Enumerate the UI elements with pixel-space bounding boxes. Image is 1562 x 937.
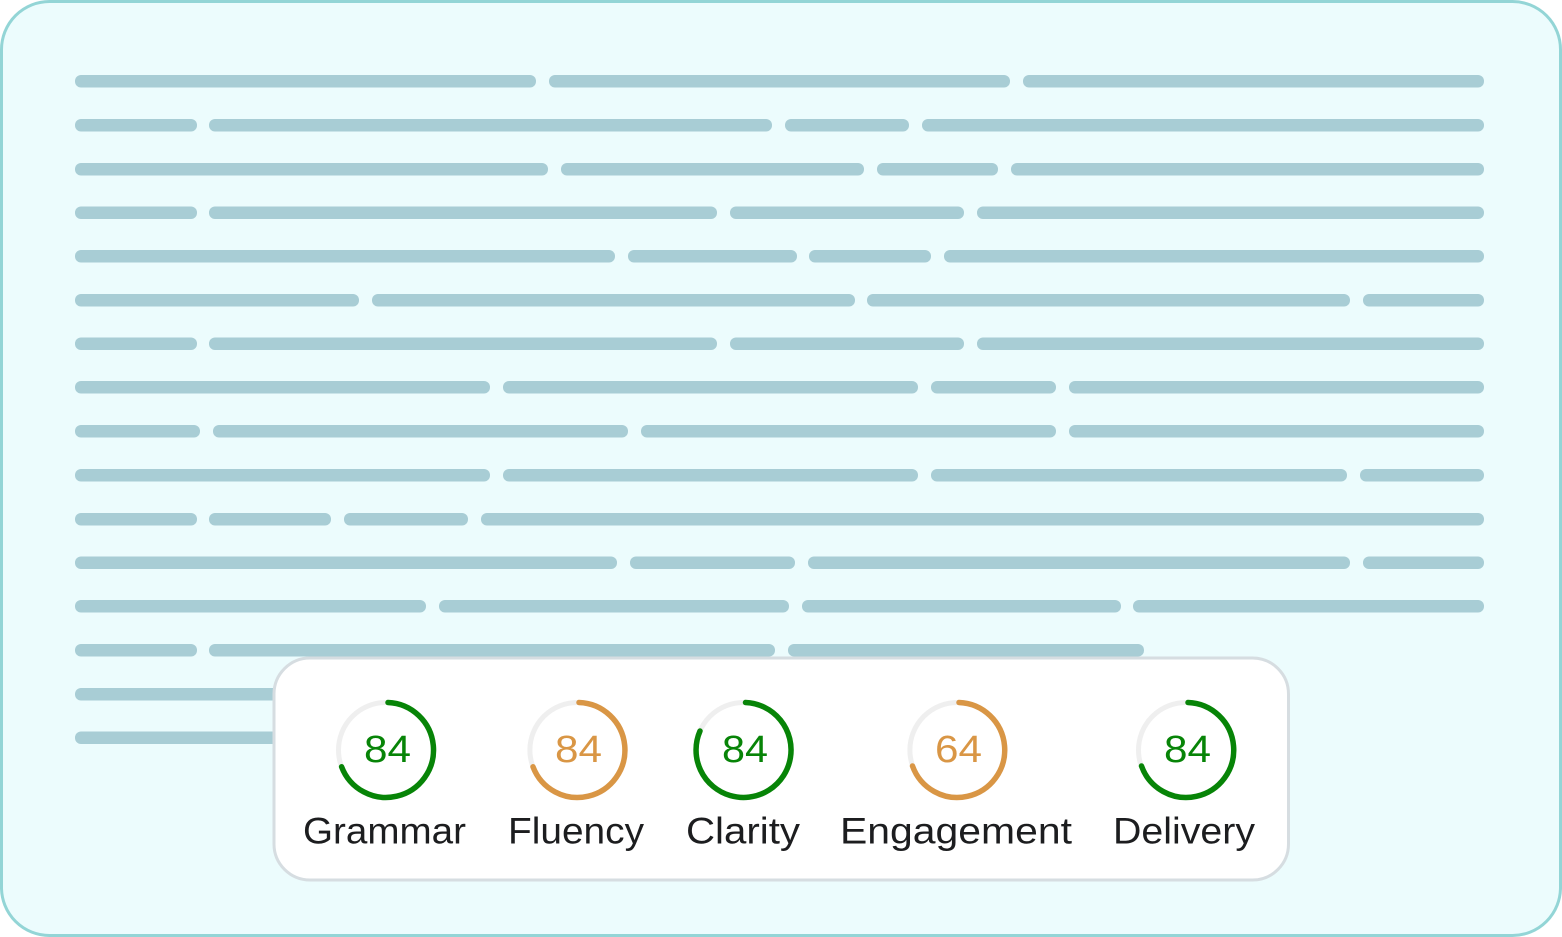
score: Fluency bbox=[508, 702, 645, 852]
score: Fluency: Fluency bbox=[508, 810, 645, 852]
score: Clarity: Clarity bbox=[686, 810, 801, 852]
placeholder text lines bbox=[75, 75, 1484, 744]
score: Clarity bbox=[686, 702, 801, 852]
score: Fluency: 84 bbox=[555, 729, 602, 771]
score: Grammar: 84 bbox=[364, 729, 411, 771]
panel: scores card bbox=[274, 658, 1288, 880]
score: Clarity: 84 bbox=[722, 729, 768, 771]
score: Engagement: 64 bbox=[935, 729, 982, 771]
score: Delivery: Delivery bbox=[1113, 810, 1256, 852]
score: Engagement bbox=[840, 702, 1073, 852]
score: Delivery bbox=[1113, 702, 1256, 852]
score: Grammar: Grammar bbox=[303, 810, 466, 852]
score: Engagement: Engagement bbox=[840, 810, 1073, 852]
score: Grammar bbox=[303, 702, 466, 852]
score: Delivery: 84 bbox=[1164, 729, 1211, 771]
